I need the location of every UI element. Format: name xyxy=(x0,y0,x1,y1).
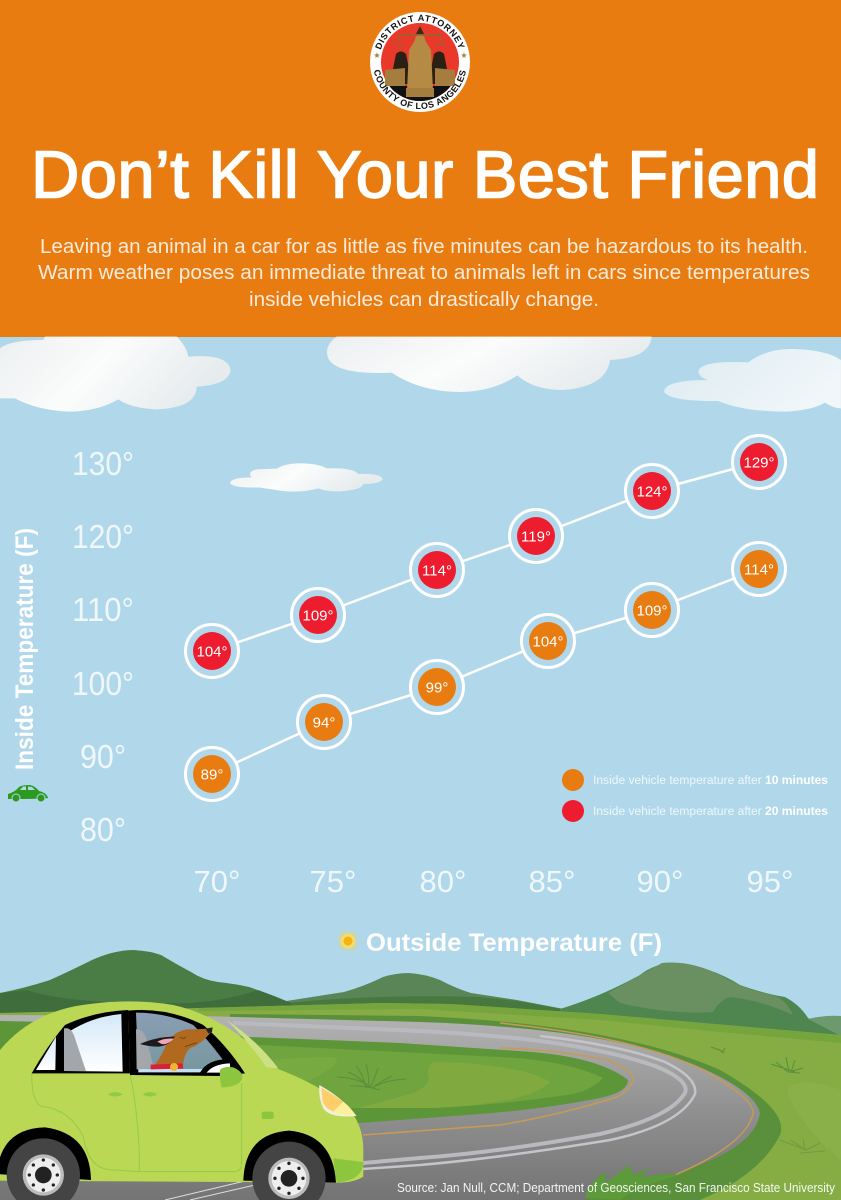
landscape xyxy=(0,950,841,1200)
bumper xyxy=(333,1158,363,1183)
y axis labels xyxy=(72,445,134,848)
y axis labels: 80° xyxy=(80,811,126,848)
inner grass island xyxy=(0,1021,628,1130)
grass tufts xyxy=(337,1047,825,1200)
line chart: 20 minutes series: 119° xyxy=(521,528,551,546)
dog xyxy=(140,1027,213,1071)
y axis title: Inside Temperature (F) xyxy=(11,528,39,770)
rear wheel xyxy=(0,1127,91,1200)
headlight xyxy=(319,1085,357,1116)
steering wheel xyxy=(200,1059,230,1073)
seal: District Attorney County of Los Angeles: DISTRICT ATTORNEY xyxy=(375,14,465,50)
line chart: 10 minutes series: 89° xyxy=(201,766,223,784)
legend xyxy=(562,769,828,822)
x axis labels: 90° xyxy=(637,864,683,899)
y axis labels: 120° xyxy=(72,518,134,555)
y axis labels: 90° xyxy=(80,738,126,775)
sky background xyxy=(0,337,841,1200)
cloud: top right xyxy=(664,349,841,412)
line chart: 10 minutes series: 94° xyxy=(313,714,335,732)
line chart: 20 minutes series xyxy=(186,436,786,678)
side mirror xyxy=(220,1067,242,1087)
x axis labels: 85° xyxy=(529,864,575,899)
hills xyxy=(0,950,841,1050)
road xyxy=(0,1015,760,1200)
cloud: small xyxy=(230,463,383,492)
icon: green car xyxy=(8,785,48,802)
door seams xyxy=(32,1073,242,1172)
x axis labels xyxy=(194,864,793,899)
car body xyxy=(0,1001,363,1183)
door handles xyxy=(108,1092,157,1096)
intro paragraph: inside vehicles can drastically change. xyxy=(249,289,599,311)
car with dog xyxy=(0,1001,363,1200)
line chart: 20 minutes series: 109° xyxy=(302,608,334,624)
line chart: 20 minutes series: 124° xyxy=(636,484,668,500)
x axis title: Outside Temperature (F) xyxy=(366,929,662,957)
cloud: top centre xyxy=(327,337,652,392)
icon: sun xyxy=(337,930,359,952)
legend: Inside vehicle temperature after 20 minutes xyxy=(593,806,828,818)
second hill (centre) xyxy=(280,973,590,1030)
line chart: 10 minutes series: 109° xyxy=(636,602,668,620)
first hill (left) xyxy=(0,950,300,1030)
legend: Inside vehicle temperature after 10 minutes xyxy=(593,775,828,787)
y axis labels: 110° xyxy=(72,591,134,628)
seal: District Attorney County of Los Angeles: ★ xyxy=(460,51,468,60)
seats xyxy=(64,1028,86,1071)
seal: District Attorney County of Los Angeles: ★ xyxy=(373,51,381,60)
seal: District Attorney County of Los Angeles: COUNTY OF LOS ANGELES xyxy=(374,70,466,109)
seal: District Attorney County of Los Angeles xyxy=(370,12,470,112)
intro paragraph: Warm weather poses an immediate threat to animals left in cars since temperatures xyxy=(38,262,810,284)
x axis labels: 80° xyxy=(420,864,466,899)
x axis labels: 95° xyxy=(747,864,793,899)
y axis labels: 130° xyxy=(72,445,134,482)
windows xyxy=(32,1010,130,1073)
title: Don’t Kill Your Best Friend xyxy=(31,138,819,212)
road markings xyxy=(165,1023,753,1200)
intro paragraph xyxy=(38,236,810,311)
line chart: 20 minutes series: 104° xyxy=(196,644,228,660)
x axis labels: 70° xyxy=(194,864,240,899)
line chart: 10 minutes series: 114° xyxy=(744,562,774,578)
line chart: 20 minutes series: 129° xyxy=(743,454,775,472)
x axis labels: 75° xyxy=(310,864,356,899)
y axis labels: 100° xyxy=(72,665,134,702)
line chart: 10 minutes series: 104° xyxy=(532,634,564,650)
front wheel xyxy=(243,1131,336,1200)
right hill xyxy=(560,963,841,1050)
cloud: top left xyxy=(0,337,231,412)
line chart: 10 minutes series xyxy=(186,542,786,800)
intro paragraph: Leaving an animal in a car for as little as five minutes can be hazardous to its health. xyxy=(40,236,808,258)
line chart: 10 minutes series: 99° xyxy=(426,680,448,696)
header banner xyxy=(0,0,841,337)
grass band along road xyxy=(230,1014,781,1200)
line chart: 20 minutes series: 114° xyxy=(422,562,452,580)
grass xyxy=(0,1003,841,1200)
